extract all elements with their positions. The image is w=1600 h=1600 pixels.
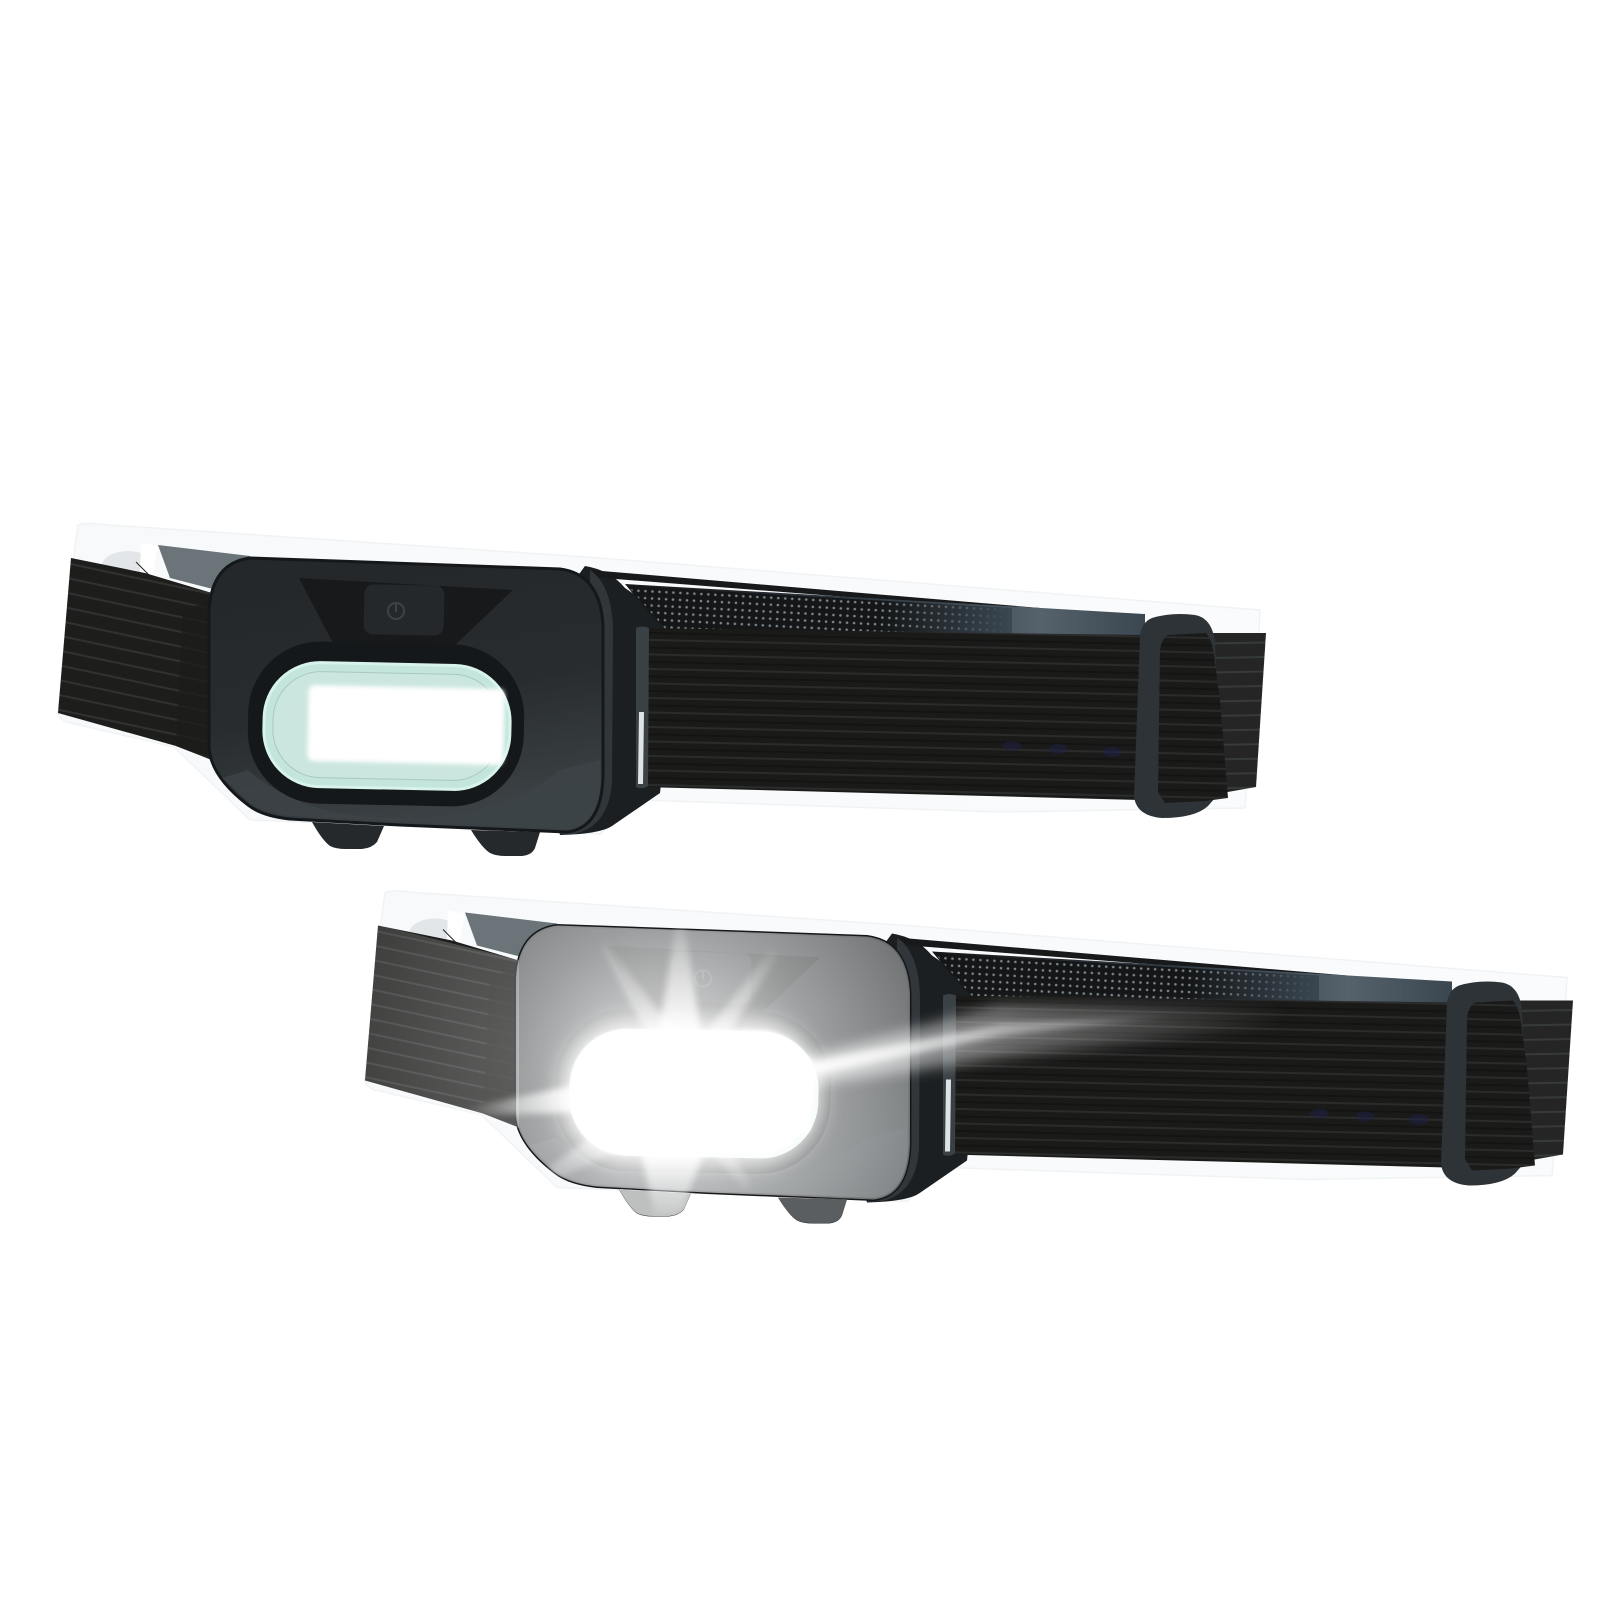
ray: upper left xyxy=(600,942,680,1040)
slider buckle xyxy=(1134,614,1228,818)
second headlamp body xyxy=(365,891,1573,1224)
clear packaging band xyxy=(58,524,1260,834)
ray: left xyxy=(465,1083,585,1116)
feet xyxy=(312,822,540,856)
strap clip bar xyxy=(636,626,649,788)
LED panel xyxy=(307,685,505,765)
power button xyxy=(363,584,445,636)
ray: lower left xyxy=(535,1130,630,1186)
ray: upper right xyxy=(700,950,778,1040)
lit lens xyxy=(571,1030,814,1155)
upper mesh strip xyxy=(590,570,1145,637)
ray: lower right xyxy=(710,1148,752,1190)
ray: right haze xyxy=(800,1005,1290,1086)
lower face facet xyxy=(222,760,600,829)
ray: right core xyxy=(800,1016,1170,1078)
lamp housing back xyxy=(540,566,674,835)
right strap end xyxy=(1205,633,1266,793)
housing front face xyxy=(209,558,603,832)
ray: down xyxy=(640,1150,705,1215)
glow across left strap xyxy=(365,925,519,1128)
ray: up xyxy=(658,920,702,1040)
headlamp: switched on xyxy=(365,891,1573,1224)
light rays xyxy=(465,920,1290,1215)
halo xyxy=(560,1020,822,1166)
housing wash xyxy=(516,926,910,1200)
left strap xyxy=(58,558,212,760)
reflection patch behind left strap xyxy=(102,543,250,608)
lens xyxy=(263,661,511,791)
foot wash xyxy=(619,1189,691,1216)
faint navy dots on strap xyxy=(1003,741,1122,757)
button recess xyxy=(299,578,513,647)
housing rim xyxy=(560,570,613,834)
headlamp: switched off xyxy=(58,524,1266,856)
lens surround xyxy=(246,640,526,808)
main elastic strap xyxy=(642,628,1140,800)
second foot wash xyxy=(778,1197,847,1223)
